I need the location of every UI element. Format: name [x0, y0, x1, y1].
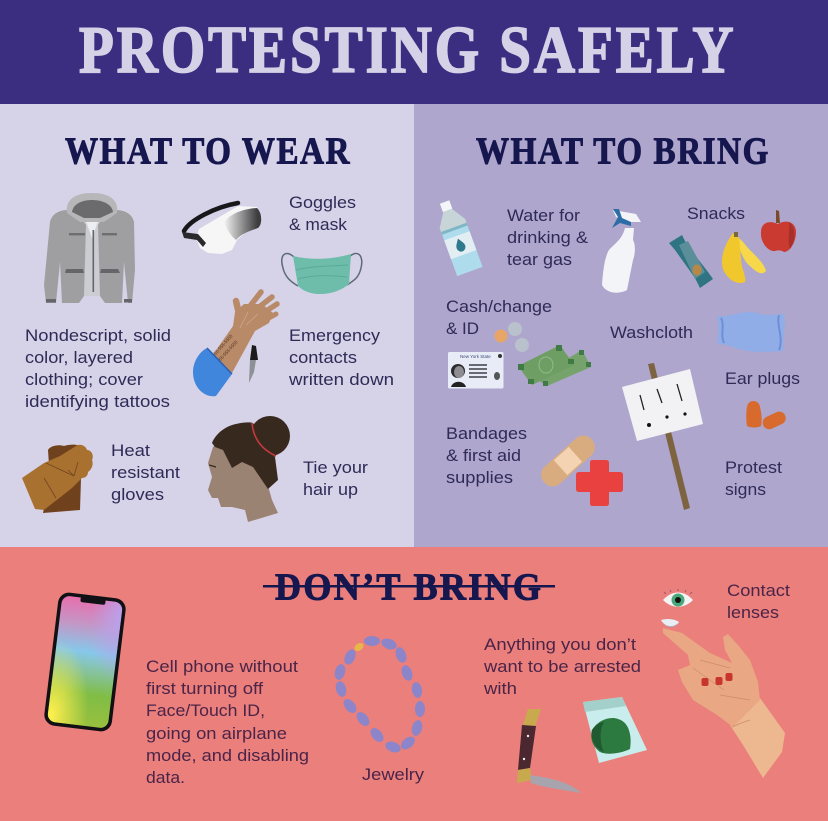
icon: jacket: [44, 193, 135, 303]
labels: what to wear: Emergency: [289, 327, 381, 345]
labels: what to bring: [446, 205, 800, 499]
panel: what to bring: [414, 104, 828, 547]
labels: don't bring: lenses: [727, 604, 779, 622]
labels: don't bring: want to be arrested: [483, 658, 641, 676]
labels: what to wear: hair up: [303, 481, 358, 499]
icon: coins: [494, 322, 529, 352]
labels: what to wear: Nondescript, solid: [25, 327, 171, 345]
labels: what to bring: Bandages: [446, 425, 527, 443]
labels: what to bring: signs: [725, 481, 766, 499]
icon: bananas: [722, 232, 766, 283]
icon: eye: [663, 589, 693, 607]
labels: what to wear: Tie your: [303, 459, 369, 477]
icon: first aid cross: [576, 460, 623, 506]
labels: what to bring: supplies: [446, 469, 513, 487]
heading: don't bring (struck through): DON’T BRING: [275, 567, 541, 609]
labels: don't bring: Cell phone without: [146, 658, 298, 676]
icon: cell phone: [43, 591, 127, 733]
labels: don't bring: [146, 582, 790, 787]
labels: don't bring: with: [483, 680, 517, 698]
icon: knife: [517, 709, 581, 793]
labels: don't bring: data.: [146, 769, 185, 787]
title: PROTESTING SAFELY: [79, 14, 734, 87]
icon: goggles: [182, 203, 262, 254]
heading: what to bring: WHAT TO BRING: [476, 129, 768, 172]
labels: what to wear: color, layered: [25, 349, 133, 367]
icon: water bottle: [432, 197, 483, 276]
labels: what to bring: & ID: [446, 320, 479, 338]
labels: what to wear: resistant: [111, 464, 180, 482]
icon: contact lens: [661, 619, 679, 627]
labels: what to wear: written down: [288, 371, 394, 389]
icon: face mask: [282, 253, 362, 294]
header band: [0, 0, 828, 104]
sleeve: [193, 348, 232, 396]
labels: don't bring: going on airplane: [146, 725, 287, 743]
labels: what to bring: Protest: [725, 459, 782, 477]
labels: don't bring: Jewelry: [362, 766, 425, 784]
icon: ID card: [448, 352, 504, 388]
labels: what to bring: tear gas: [507, 251, 572, 269]
nails: [702, 673, 732, 686]
labels: what to bring: drinking &: [507, 229, 588, 247]
labels: what to bring: Snacks: [687, 205, 745, 223]
icon: arm with written numbers: 555-555-5555: [216, 339, 239, 364]
icon: head with hair tied up: [208, 416, 290, 522]
icon: cash: [518, 345, 591, 386]
labels: don't bring: Contact: [727, 582, 790, 600]
icon: hand: [663, 628, 785, 778]
labels: what to wear: clothing; cover: [25, 371, 144, 389]
labels: what to bring: Cash/change: [446, 298, 552, 316]
icon: bead necklace: [333, 636, 425, 754]
labels: what to wear: Heat: [111, 442, 150, 460]
panel: what to wear: [0, 104, 414, 547]
icon: ear plugs: [746, 401, 788, 431]
labels: what to wear: & mask: [289, 216, 348, 234]
icon: gloves: [22, 445, 93, 513]
labels: what to wear: gloves: [111, 486, 164, 504]
labels: what to wear: contacts: [289, 349, 357, 367]
icon: apple: [761, 210, 796, 252]
icon: protest sign: [622, 363, 703, 510]
icon: spray bottle: [602, 209, 641, 293]
icon: arm with written numbers: [193, 292, 277, 396]
icon: snack bar: [669, 235, 713, 288]
labels: what to bring: Ear plugs: [725, 370, 800, 388]
icon: bandage: [537, 431, 599, 491]
labels: don't bring: mode, and disabling: [146, 747, 309, 765]
labels: don't bring: first turning off: [146, 680, 263, 698]
labels: what to wear: Goggles: [289, 194, 356, 212]
pen: [249, 360, 256, 383]
icon: bag of green substance: [583, 697, 647, 763]
heading: what to wear: WHAT TO WEAR: [65, 129, 351, 172]
icon: ID card: New York State: [460, 354, 491, 359]
panel: don't bring: [0, 547, 828, 821]
labels: what to wear: [25, 194, 394, 504]
labels: what to wear: identifying tattoos: [25, 393, 170, 411]
labels: what to bring: Washcloth: [610, 324, 693, 342]
icon: washcloth: [717, 312, 785, 352]
labels: what to bring: Water for: [507, 207, 581, 225]
icon: arm with written numbers: 555-555-5555: [211, 333, 234, 358]
labels: don't bring: Face/Touch ID,: [146, 702, 265, 720]
labels: what to bring: & first aid: [446, 447, 521, 465]
labels: don't bring: Anything you don’t: [484, 636, 636, 654]
